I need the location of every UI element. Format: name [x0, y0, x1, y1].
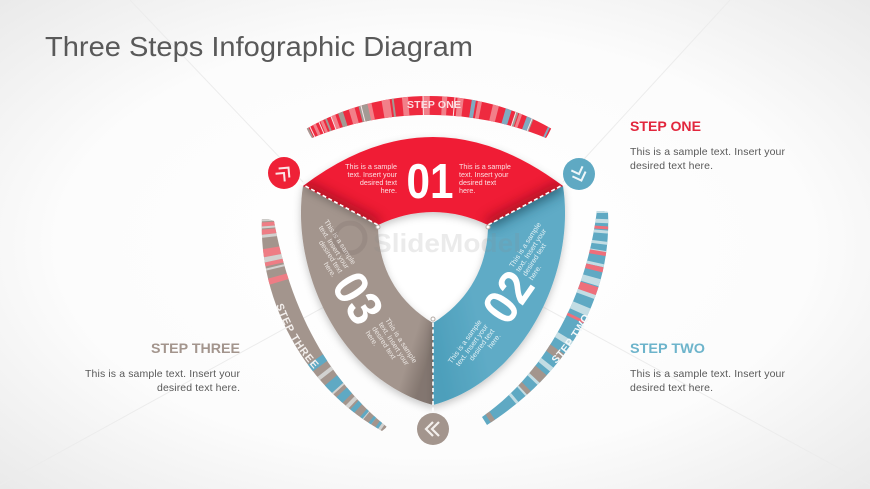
text block 03 upper: here.	[322, 260, 338, 279]
text block 01 right: here.	[459, 186, 475, 195]
text block 02 upper: This is a sample	[507, 221, 543, 269]
number 03: 03	[321, 263, 393, 334]
text block 01 left	[345, 162, 398, 195]
centre hole	[378, 212, 488, 323]
strip label: step two: STEP TWO	[552, 314, 588, 363]
text block 01 right: text. Insert your	[459, 170, 509, 179]
strip: step two	[484, 211, 602, 421]
watermark: SlideModel	[373, 228, 521, 258]
callout: step one: STEP ONE	[630, 118, 701, 134]
text block 01 left: here.	[381, 186, 397, 195]
strip label: step three: STEP THREE	[276, 304, 319, 369]
dashed seams	[294, 180, 572, 414]
text block 03 lower: desired text	[370, 325, 398, 361]
title: Three Steps Infographic Diagram	[45, 31, 473, 62]
strip: step three	[268, 219, 385, 429]
number 01: 01	[406, 155, 454, 209]
callout: step three: STEP THREE	[151, 340, 240, 356]
text block 03 lower: text. Insert your	[377, 320, 412, 367]
text block 03 lower: This is a sample	[383, 316, 419, 365]
text block 01 left: text. Insert your	[347, 170, 398, 179]
callout: step two: STEP TWO	[630, 340, 705, 356]
callout: step three: desired text here.	[157, 382, 240, 394]
text block 02 upper: here.	[527, 263, 543, 282]
text block 02 lower: desired text	[467, 327, 496, 362]
callout: step three	[85, 340, 240, 394]
segment 01 red	[303, 137, 563, 225]
text block 02 upper: text. Insert your	[514, 226, 549, 273]
text block 03 upper	[302, 218, 358, 279]
text block 01 right: This is a sample	[459, 162, 511, 171]
text block 01 right	[459, 162, 511, 195]
callout: step two: This is a sample text. Insert your	[630, 368, 786, 380]
callout: step one: desired text here.	[630, 160, 713, 172]
text block 02 lower: This is a sample	[446, 318, 484, 365]
strip label: step one: STEP ONE	[407, 99, 461, 111]
number 02: 02	[472, 262, 545, 334]
segment 03 brown	[301, 186, 433, 405]
watermark	[335, 223, 521, 258]
text block 02 upper: desired text	[520, 242, 548, 278]
callout: step two: desired text here.	[630, 382, 713, 394]
icon: red chevrons	[268, 157, 300, 189]
icon: blue chevrons	[563, 158, 595, 190]
text block 03 upper: This is a sample	[322, 218, 358, 266]
text block 01 left: desired text	[360, 178, 397, 187]
text block 03 lower: here.	[364, 329, 380, 348]
text block 02 upper	[507, 221, 563, 282]
text block 01 right: desired text	[459, 178, 496, 187]
callout: step one	[630, 118, 786, 172]
segment 02 blue	[433, 186, 565, 405]
text block 02 lower	[446, 317, 503, 379]
callout: step two	[630, 340, 786, 394]
text block 01 left: This is a sample	[345, 162, 397, 171]
callout: step three: This is a sample text. Insert your	[85, 368, 240, 380]
icon: brown chevrons	[417, 413, 449, 445]
text block 02 lower: here.	[486, 332, 503, 350]
callout: step one: This is a sample text. Insert your	[630, 146, 786, 158]
text block 03 lower	[364, 316, 419, 377]
text block 03 upper: text. Insert your	[317, 224, 352, 271]
text block 02 lower: text. Insert your	[454, 322, 490, 368]
text block 03 upper: desired text	[317, 239, 345, 275]
strip: step one	[309, 105, 549, 133]
